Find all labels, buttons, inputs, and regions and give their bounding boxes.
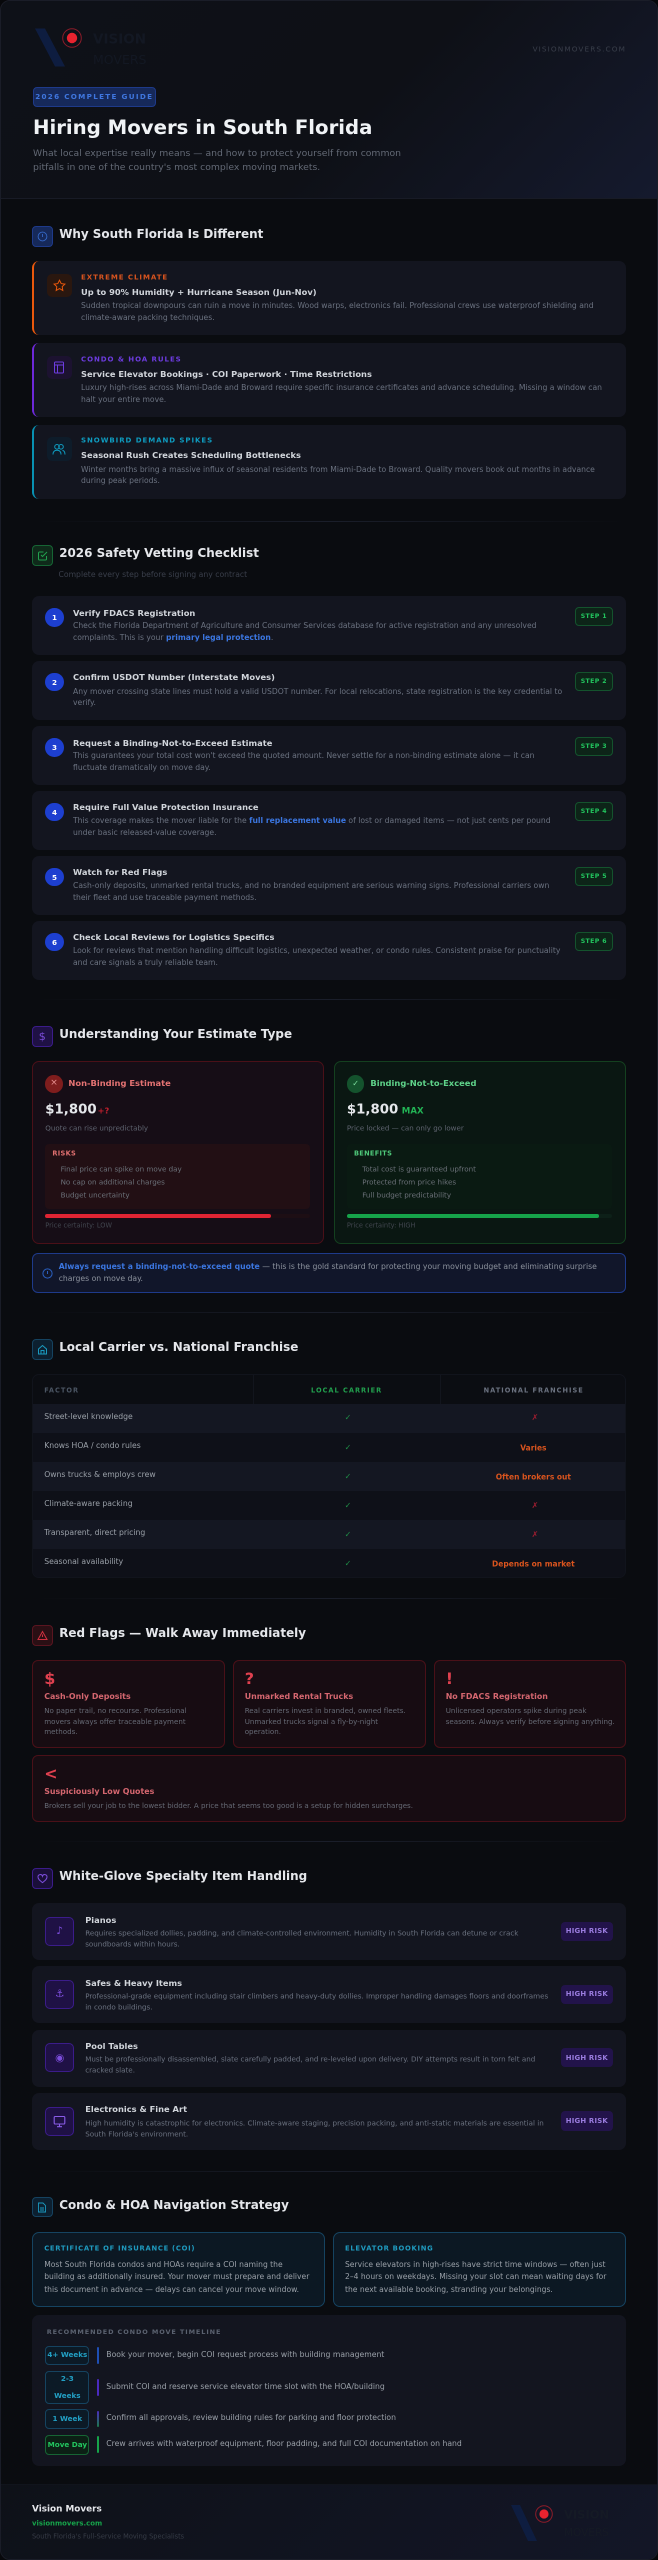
callout: always request binding <box>32 1253 626 1293</box>
step <box>45 2371 89 2404</box>
card: condo hoa rules: halt your entire move. <box>81 395 166 404</box>
row: ✓ <box>345 1559 351 1568</box>
step 5: STEP 5 <box>581 873 607 880</box>
row: ✓ <box>345 1443 351 1452</box>
flag: low quotes: Brokers sell your job to the lowest bidder. A price that seems too good is a setup for hidden surcharges. <box>44 1801 413 1810</box>
card: elevator: the next available booking, stranding your belongings. <box>345 2285 553 2294</box>
row <box>33 1462 627 1491</box>
row <box>33 1549 627 1578</box>
timeline panel <box>32 2315 626 2466</box>
item: safes: Professional-grade equipment including stair climbers and heavy-duty dollies. Improper handling damages floors and doorframes <box>85 1992 548 2001</box>
subheading: Complete every step before signing any contract <box>58 570 247 579</box>
step: 1 Week <box>52 2414 82 2423</box>
row <box>33 1491 627 1520</box>
item: pool tables: Must be professionally disassembled, slate carefully padded, and re-leveled upon delivery. DIY attempts result in torn felt and <box>85 2055 535 2064</box>
step 4: This coverage makes the mover liable for the full replacement value of lost or damaged items — not just cents per pound <box>73 816 551 825</box>
card: snowbird demand: during peak periods. <box>81 477 160 486</box>
flag: no fdacs: ! <box>446 1669 453 1688</box>
step 6: Look for reviews that mention handling difficult logistics, unexpected weather, or condo rules. Consistent praise for punctuality <box>73 946 560 955</box>
heading: Understanding Your Estimate Type <box>59 1027 292 1041</box>
flag: unmarked trucks: Unmarked Rental Trucks <box>245 1692 353 1701</box>
certainty bar low <box>45 1214 310 1218</box>
price: $1,800+? <box>45 1103 109 1118</box>
panel: non-binding estimate: Non-Binding Estimate <box>68 1078 171 1088</box>
row: ✓ <box>345 1501 351 1510</box>
row: Varies <box>520 1443 547 1452</box>
step 3: fluctuate dramatically on move day. <box>73 763 211 772</box>
flag: no fdacs: seasons. Always verify before signing anything. <box>446 1717 615 1726</box>
row <box>33 1404 627 1433</box>
flag: cash only: methods. <box>44 1727 78 1736</box>
step <box>45 2346 89 2365</box>
table header: NATIONAL FRANCHISE <box>484 1387 584 1395</box>
step 4 <box>32 791 626 850</box>
heading <box>32 226 264 247</box>
footer: South Florida's Full-Service Moving Specialists <box>32 2533 184 2541</box>
step 1: complaints. This is your primary legal protection. <box>73 633 273 642</box>
row: Knows HOA / condo rules <box>44 1441 141 1450</box>
item: electronics: HIGH RISK <box>566 2117 608 2125</box>
card: coi: building as additionally insured. Your mover must prepare and deliver <box>44 2272 309 2281</box>
step 5: Watch for Red Flags <box>73 867 167 877</box>
row: Owns trucks & employs crew <box>44 1470 156 1479</box>
step 4: Require Full Value Protection Insurance <box>73 802 259 812</box>
step: Weeks <box>54 2391 81 2400</box>
subtitle: What local expertise really means — and how to protect yourself from common <box>33 148 401 158</box>
logo <box>35 28 146 67</box>
item: safes: Safes & Heavy Items <box>85 1978 182 1988</box>
flag: unmarked trucks <box>232 1660 426 1748</box>
step 2: Any mover crossing state lines must hold a valid USDOT number. For local relocations, state registration is the key credential to <box>73 687 562 696</box>
step 6: 6 <box>52 938 57 947</box>
section: safety vetting checklist <box>32 545 626 980</box>
footer logo: MOVERS <box>564 2527 609 2539</box>
step 3: Request a Binding-Not-to-Exceed Estimate <box>73 738 272 748</box>
icon: info <box>42 1268 53 1279</box>
subtitle <box>33 148 401 173</box>
item: pool tables: HIGH RISK <box>566 2054 608 2062</box>
item: pool tables <box>32 2030 626 2087</box>
item: safes: in condo buildings. <box>85 2002 153 2011</box>
benefits list <box>347 1144 612 1209</box>
card: coi: Most South Florida condos and HOAs require a COI naming the <box>44 2260 283 2269</box>
item: safes: HIGH RISK <box>566 1990 608 1998</box>
card: coi: CERTIFICATE OF INSURANCE (COI) <box>44 2245 195 2253</box>
card: coi <box>32 2232 325 2307</box>
row: Seasonal availability <box>44 1558 123 1567</box>
row: Transparent, direct pricing <box>44 1529 145 1538</box>
item: electronics: South Florida's environment. <box>85 2129 188 2138</box>
step 2: STEP 2 <box>581 678 607 685</box>
card: snowbird demand <box>32 425 626 499</box>
panel: non-binding estimate <box>32 1061 324 1244</box>
icon: x: × <box>50 1078 58 1088</box>
certainty bar high <box>347 1214 612 1218</box>
card: extreme climate: Up to 90% Humidity + Hurricane Season (Jun-Nov) <box>81 287 317 297</box>
icon: check: ✓ <box>352 1079 359 1088</box>
comparison table <box>32 1374 626 1578</box>
guide badge: 2026 COMPLETE GUIDE <box>35 92 153 101</box>
table header: FACTOR <box>44 1387 79 1395</box>
step 3: This guarantees your total cost won't exceed the quoted amount. Never settle for a non-binding estimate alone — it can <box>73 751 535 760</box>
flag: cash only: Cash-Only Deposits <box>44 1692 131 1701</box>
flag: no fdacs: No FDACS Registration <box>446 1692 548 1701</box>
step: 4+ Weeks <box>47 2350 87 2359</box>
item: pianos: HIGH RISK <box>566 1927 608 1935</box>
item: pianos: Pianos <box>85 1915 116 1925</box>
row: ✓ <box>345 1530 351 1539</box>
timeline panel: Crew arrives with waterproof equipment, floor padding, and full COI documentation on hand <box>106 2439 462 2448</box>
card: elevator: Service elevators in high-rises have strict time windows — often just <box>345 2260 606 2269</box>
step <box>45 2409 89 2429</box>
risks list: Budget uncertainty <box>61 1190 130 1199</box>
card: condo hoa rules: Service Elevator Bookings · COI Paperwork · Time Restrictions <box>81 369 372 379</box>
callout: always request binding: charges on move day. <box>59 1274 143 1283</box>
item: safes <box>32 1966 626 2023</box>
heading: Local Carrier vs. National Franchise <box>59 1340 298 1354</box>
heading: Why South Florida Is Different <box>59 227 263 241</box>
flag: cash only <box>32 1660 224 1748</box>
risks list: RISKS <box>52 1150 76 1158</box>
row: ✓ <box>345 1413 351 1422</box>
section: condo hoa strategy <box>32 2197 626 2466</box>
title: Hiring Movers in South Florida <box>33 116 372 139</box>
risks list: No cap on additional charges <box>61 1177 165 1186</box>
panel: binding not to exceed: Price locked — can only go lower <box>347 1124 464 1133</box>
item: pool tables: Pool Tables <box>85 2041 138 2051</box>
timeline panel: RECOMMENDED CONDO MOVE TIMELINE <box>47 2328 221 2336</box>
card: extreme climate <box>32 261 626 335</box>
panel: binding not to exceed: Binding-Not-to-Exceed <box>370 1078 476 1088</box>
timeline panel: Book your mover, begin COI request process with building management <box>106 2350 384 2359</box>
step 6 <box>32 921 626 980</box>
item: safes: ⚓ <box>55 1988 64 2000</box>
step 2: Confirm USDOT Number (Interstate Moves) <box>73 672 275 682</box>
step: Move Day <box>48 2440 87 2449</box>
heading: Red Flags — Walk Away Immediately <box>59 1626 306 1640</box>
flag: low quotes <box>32 1755 626 1822</box>
row: ✗ <box>532 1413 538 1422</box>
row: ✓ <box>345 1472 351 1481</box>
flag: unmarked trucks: ? <box>245 1669 254 1688</box>
panel: non-binding estimate: Quote can rise unpredictably <box>45 1124 148 1133</box>
item: pool tables: ◉ <box>55 2052 64 2064</box>
step 6: STEP 6 <box>581 938 607 945</box>
footer: Vision Movers <box>32 2505 102 2515</box>
row: ✗ <box>532 1530 538 1539</box>
footer: visionmovers.com <box>32 2520 102 2528</box>
item: pianos: ♪ <box>56 1925 63 1937</box>
card: extreme climate: EXTREME CLIMATE <box>81 273 168 281</box>
heading: $ <box>39 1030 46 1043</box>
heading <box>32 545 259 566</box>
row: Often brokers out <box>496 1472 571 1481</box>
section: red flags <box>32 1625 626 1822</box>
row <box>33 1433 627 1462</box>
card: extreme climate: climate-aware packing techniques. <box>81 313 215 322</box>
step 5: their fleet and use traceable payment methods. <box>73 893 257 902</box>
step 6: Check Local Reviews for Logistics Specifics <box>73 932 274 942</box>
heading <box>32 1339 298 1360</box>
step <box>45 2435 89 2455</box>
guide badge <box>33 87 156 107</box>
step 4: under basic released-value coverage. <box>73 828 217 837</box>
card: snowbird demand: Winter months bring a massive influx of seasonal residents from Miami-Dade to Broward. Quality movers book out months in advance <box>81 465 595 474</box>
item: pianos: Requires specialized dollies, padding, and climate-controlled environment. Humidity in South Florida can detune or crack <box>85 1928 518 1937</box>
card: condo hoa rules: CONDO & HOA RULES <box>81 355 182 363</box>
heading <box>32 1625 306 1646</box>
flag: unmarked trucks: Real carriers invest in branded, owned fleets. <box>245 1706 406 1715</box>
card: extreme climate: Sudden tropical downpours can ruin a move in minutes. Wood warps, electronics fail. Professional crews use waterproof shielding and <box>81 301 594 310</box>
panel: binding not to exceed <box>334 1061 626 1244</box>
price: $1,800 MAX <box>347 1103 424 1118</box>
heading: White-Glove Specialty Item Handling <box>59 1869 307 1883</box>
timeline panel: Submit COI and reserve service elevator time slot with the HOA/building <box>106 2382 385 2391</box>
item: pool tables: cracked slate. <box>85 2066 135 2075</box>
flag: no fdacs: Unlicensed operators spike during peak <box>446 1706 586 1715</box>
table header <box>33 1375 627 1405</box>
benefits list: Protected from price hikes <box>362 1177 456 1186</box>
row: ✗ <box>532 1501 538 1510</box>
card: snowbird demand: Seasonal Rush Creates Scheduling Bottlenecks <box>81 450 301 460</box>
step 5: 5 <box>52 873 57 882</box>
step 2: verify. <box>73 698 96 707</box>
flag: unmarked trucks: Unmarked trucks signal a fly-by-night <box>245 1717 378 1726</box>
icon: check <box>347 1075 364 1093</box>
flag: no fdacs <box>434 1660 626 1748</box>
item: electronics <box>32 2093 626 2150</box>
icon: star <box>47 274 72 297</box>
icon: building <box>47 356 72 379</box>
card: snowbird demand: SNOWBIRD DEMAND SPIKES <box>81 437 213 445</box>
section: white glove <box>32 1868 626 2150</box>
row: Depends on market <box>492 1559 575 1568</box>
step 3: STEP 3 <box>581 743 607 750</box>
icon: people <box>47 437 72 461</box>
step 2: 2 <box>52 678 57 687</box>
logo: VISION <box>93 31 146 47</box>
step 5: Cash-only deposits, unmarked rental trucks, and no branded equipment are serious warning signs. Professional carriers own <box>73 881 549 890</box>
section: why south florida is different <box>32 226 626 499</box>
step 1: 1 <box>52 613 57 622</box>
callout: always request binding: Always request a binding-not-to-exceed quote — this is the gold standard for protecting your moving budget and eliminating surprise <box>59 1263 597 1272</box>
benefits list: Total cost is guaranteed upfront <box>362 1165 476 1174</box>
step 4: 4 <box>52 808 57 817</box>
panel: non-binding estimate: Price certainty: LOW <box>45 1221 112 1229</box>
flag: cash only: $ <box>44 1669 55 1688</box>
item: pianos <box>32 1903 626 1960</box>
site url: VISIONMOVERS.COM <box>533 44 626 53</box>
row: Street-level knowledge <box>44 1412 133 1421</box>
step 3: 3 <box>52 743 57 752</box>
flag: unmarked trucks: operation. <box>245 1727 281 1736</box>
card: elevator <box>333 2232 626 2307</box>
benefits list: Full budget predictability <box>362 1190 451 1199</box>
heading <box>32 1026 292 1047</box>
flag: low quotes: Suspiciously Low Quotes <box>44 1787 154 1796</box>
panel: binding not to exceed: Price certainty: HIGH <box>347 1221 415 1229</box>
heading: Condo & HOA Navigation Strategy <box>59 2198 289 2212</box>
item: electronics: Electronics & Fine Art <box>85 2104 187 2114</box>
icon: x <box>45 1075 63 1093</box>
row <box>33 1520 627 1549</box>
card: condo hoa rules <box>32 343 626 417</box>
heading: 2026 Safety Vetting Checklist <box>59 546 259 560</box>
header banner <box>0 0 658 199</box>
item: electronics: High humidity is catastrophic for electronics. Climate-aware staging, precision packing, and anti-static materials are essential in <box>85 2118 544 2127</box>
step 3 <box>32 726 626 785</box>
risks list <box>45 1144 310 1209</box>
footer logo: VISION <box>564 2507 609 2521</box>
card: elevator: ELEVATOR BOOKING <box>345 2245 433 2253</box>
card: condo hoa rules: Luxury high-rises across Miami-Dade and Broward require specific insurance certificates and advance scheduling. Missing a window can <box>81 383 602 392</box>
timeline panel: Confirm all approvals, review building rules for parking and floor protection <box>106 2413 396 2422</box>
section: estimate types <box>32 1026 626 1293</box>
step 5 <box>32 856 626 915</box>
flag: cash only: No paper trail, no recourse. Professional <box>44 1706 187 1715</box>
section: local vs national <box>32 1339 626 1578</box>
step 4: STEP 4 <box>581 808 607 815</box>
subtitle: pitfalls in one of the country's most complex moving markets. <box>33 162 320 173</box>
logo: MOVERS <box>93 52 146 67</box>
flag: low quotes: < <box>44 1764 58 1783</box>
step: 2-3 <box>61 2374 74 2383</box>
heading <box>32 2197 289 2217</box>
flag: cash only: movers always offer traceable payment <box>44 1717 186 1726</box>
step 1: STEP 1 <box>581 613 607 620</box>
row: Climate-aware packing <box>44 1499 133 1508</box>
heading <box>32 1868 307 1889</box>
footer logo <box>511 2505 609 2541</box>
card: coi: this document in advance — delays can cancel your move window. <box>44 2285 299 2294</box>
table header: LOCAL CARRIER <box>311 1387 382 1395</box>
benefits list: BENEFITS <box>354 1150 392 1158</box>
item: pianos: soundboards within hours. <box>85 1939 180 1948</box>
step 6: and care signals a truly reliable team. <box>73 958 218 967</box>
footer <box>0 2484 658 2560</box>
step 1: Check the Florida Department of Agriculture and Consumer Services database for active registration and any unresolved <box>73 621 537 630</box>
risks list: Final price can spike on move day <box>61 1165 182 1174</box>
step 1: Verify FDACS Registration <box>73 608 195 618</box>
column rules <box>253 1375 254 1579</box>
card: elevator: 2–4 hours on weekdays. Missing your slot can mean waiting days for <box>345 2272 606 2281</box>
step 1 <box>32 596 626 655</box>
step 2 <box>32 661 626 720</box>
